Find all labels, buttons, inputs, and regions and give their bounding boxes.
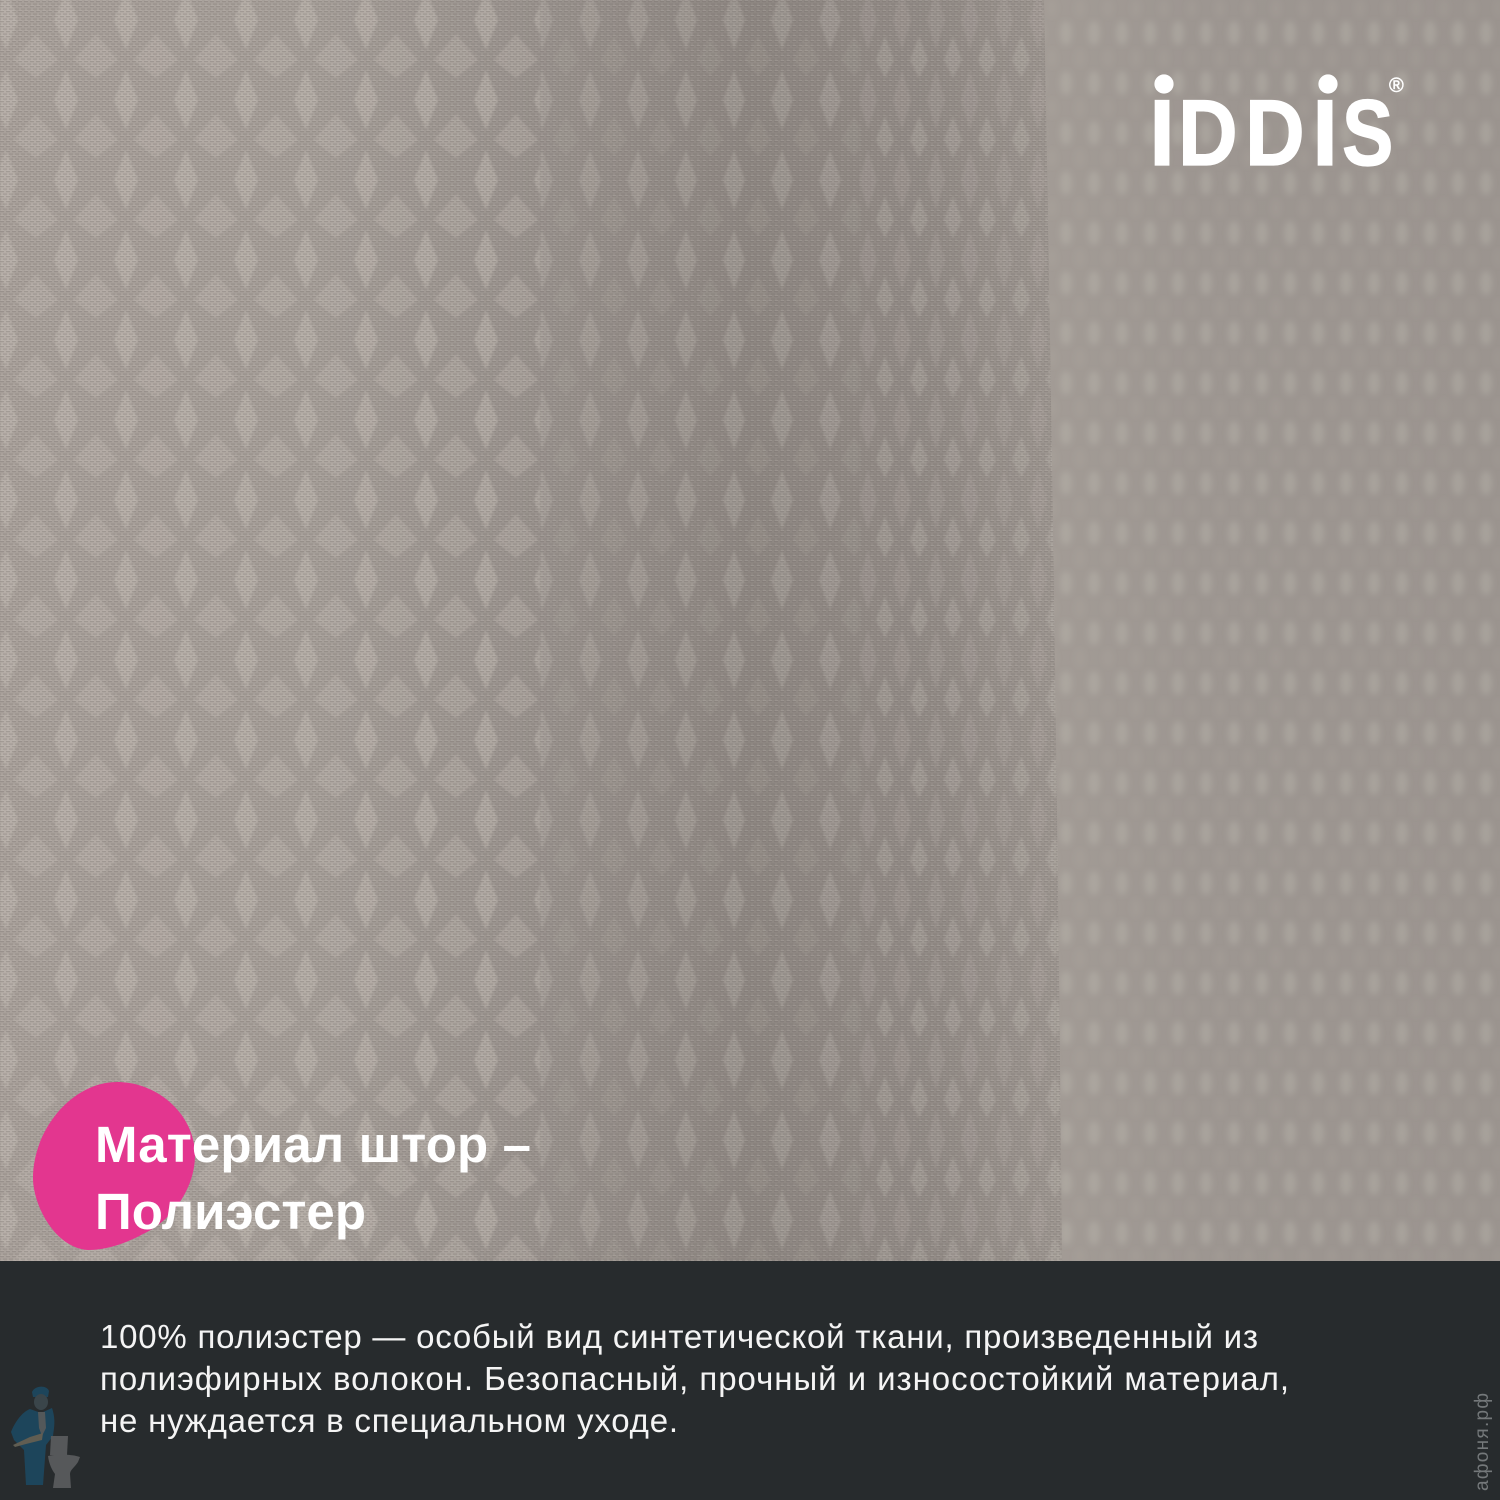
logo: IDDIS: ® bbox=[1389, 75, 1404, 97]
logo: IDDIS: I bbox=[1149, 80, 1175, 185]
logo: IDDIS: D bbox=[1178, 80, 1238, 185]
icon: plumber with toilet watermark bbox=[11, 1387, 80, 1488]
pink blob accent bbox=[33, 1082, 195, 1250]
logo: IDDIS: D bbox=[1245, 80, 1305, 185]
logo: IDDIS: S bbox=[1342, 81, 1393, 186]
heading: Полиэстер bbox=[95, 1183, 366, 1240]
logo: IDDIS: I bbox=[1312, 80, 1338, 185]
foreground fabric: diamond weave bbox=[0, 0, 1070, 1261]
bottom dark band bbox=[0, 1261, 1500, 1500]
heading bbox=[95, 1116, 531, 1240]
description text: не нуждается в специальном уходе. bbox=[100, 1402, 678, 1439]
heading: Материал штор – bbox=[95, 1116, 531, 1173]
logo: IDDIS bbox=[1149, 75, 1404, 186]
description text bbox=[100, 1318, 1289, 1439]
background fabric: blurred far curtain bbox=[1030, 0, 1500, 1261]
watermark: site name: афоня.рф bbox=[1472, 1393, 1493, 1491]
description text: 100% полиэстер — особый вид синтетической ткани, произведенный из bbox=[100, 1318, 1258, 1355]
description text: полиэфирных волокон. Безопасный, прочный и износостойкий материал, bbox=[100, 1360, 1289, 1397]
